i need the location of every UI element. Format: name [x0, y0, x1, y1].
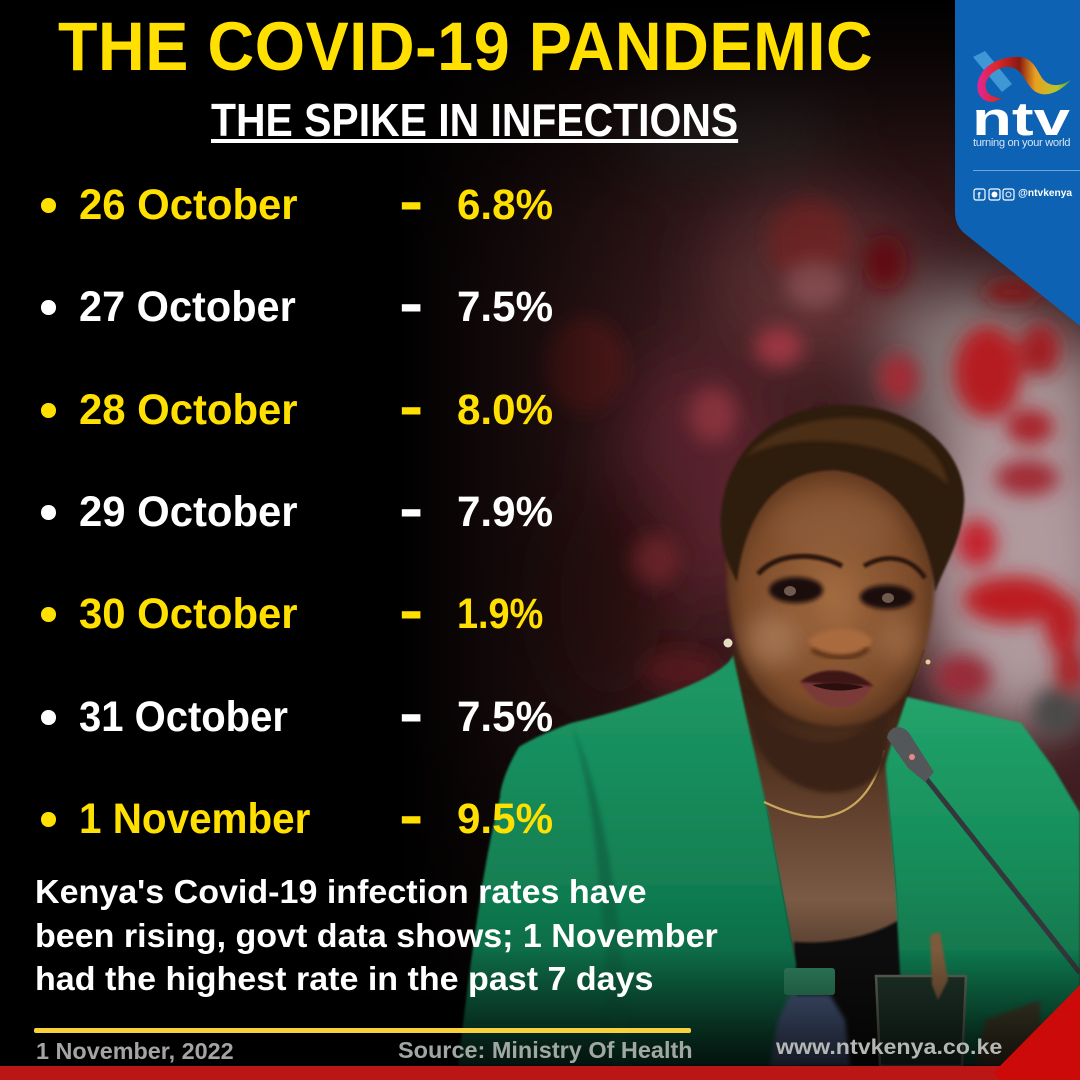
- ntv wordmark: ntv: [972, 92, 1070, 145]
- row: 26 October: 6.8%: [457, 181, 553, 229]
- row: 29 October: 29 October: [79, 488, 298, 536]
- row: 27 October: [41, 270, 553, 338]
- social icons: f: [978, 190, 982, 200]
- social handle: @ntvkenya: [1018, 188, 1072, 199]
- social divider: [973, 170, 1080, 171]
- row: 26 October: -: [399, 168, 423, 236]
- row: 27 October: 27 October: [79, 283, 296, 331]
- pen clip: [930, 932, 948, 1000]
- row: 29 October: 7.9%: [457, 488, 553, 536]
- arm: [975, 1000, 1040, 1066]
- source: Source: Ministry Of Health: [398, 1037, 693, 1063]
- row: 1 November: 9.5%: [457, 795, 553, 843]
- title: THE COVID-19 PANDEMIC: [58, 8, 873, 85]
- nose: [808, 629, 872, 655]
- water bottle: [770, 995, 850, 1066]
- jacket right: [885, 697, 1080, 1066]
- row: 1 November: [41, 782, 553, 850]
- row: 31 October: -: [399, 680, 423, 748]
- row: 1 November: -: [399, 782, 423, 850]
- row: 28 October: [41, 373, 553, 441]
- ntv logo symbol: [973, 51, 1071, 102]
- eyes: [769, 577, 823, 603]
- row: 29 October: -: [399, 475, 423, 543]
- row: 31 October: [41, 680, 553, 748]
- row: 27 October: -: [399, 270, 423, 338]
- row: 31 October: 7.5%: [457, 693, 553, 741]
- row: 30 October: -: [399, 577, 423, 645]
- jacket lapel shade: [571, 723, 630, 1066]
- jacket left: [458, 655, 797, 1066]
- row: 26 October: [41, 168, 553, 236]
- row: 26 October: 26 October: [79, 181, 298, 229]
- row: 28 October: 8.0%: [457, 386, 553, 434]
- brows: [758, 556, 842, 574]
- row: 1 November: 1 November: [79, 795, 310, 843]
- hair: [721, 405, 964, 592]
- row: 31 October: 31 October: [79, 693, 288, 741]
- row: 28 October: -: [399, 373, 423, 441]
- neck shadow: [745, 690, 890, 793]
- summary text: Kenya's Covid-19 infection rates have: [35, 874, 647, 911]
- row: 30 October: 30 October: [79, 590, 298, 638]
- row: 27 October: 7.5%: [457, 283, 553, 331]
- necklace: [764, 750, 884, 817]
- ntv tagline: turning on your world: [973, 137, 1070, 149]
- earrings: [724, 638, 732, 648]
- face: [727, 468, 935, 726]
- microphone: [925, 777, 1080, 973]
- social icons: [974, 189, 1014, 200]
- row: 30 October: 1.9%: [457, 590, 543, 638]
- blue logo pennant: [955, 0, 1080, 326]
- summary text: been rising, govt data shows; 1 November: [35, 918, 718, 954]
- mouth: [800, 671, 873, 708]
- summary text: [35, 874, 718, 998]
- list: daily infection rates: [41, 168, 553, 850]
- row: 29 October: [41, 475, 553, 543]
- date: 1 November, 2022: [36, 1038, 234, 1064]
- footer rule: [34, 1028, 691, 1033]
- neck and chest: [733, 650, 925, 1013]
- subtitle: THE SPIKE IN INFECTIONS: [211, 94, 738, 146]
- row: 28 October: 28 October: [79, 386, 298, 434]
- summary text: had the highest rate in the past 7 days: [35, 961, 653, 998]
- bottom red band: [0, 985, 1080, 1080]
- face highlights: [746, 497, 918, 666]
- row: 30 October: [41, 577, 543, 645]
- glass: [876, 976, 966, 1066]
- virus backdrop: [300, 0, 1080, 1000]
- website: www.ntvkenya.co.ke: [776, 1035, 1002, 1059]
- portrait: [458, 405, 1080, 1066]
- black top: [794, 920, 910, 1066]
